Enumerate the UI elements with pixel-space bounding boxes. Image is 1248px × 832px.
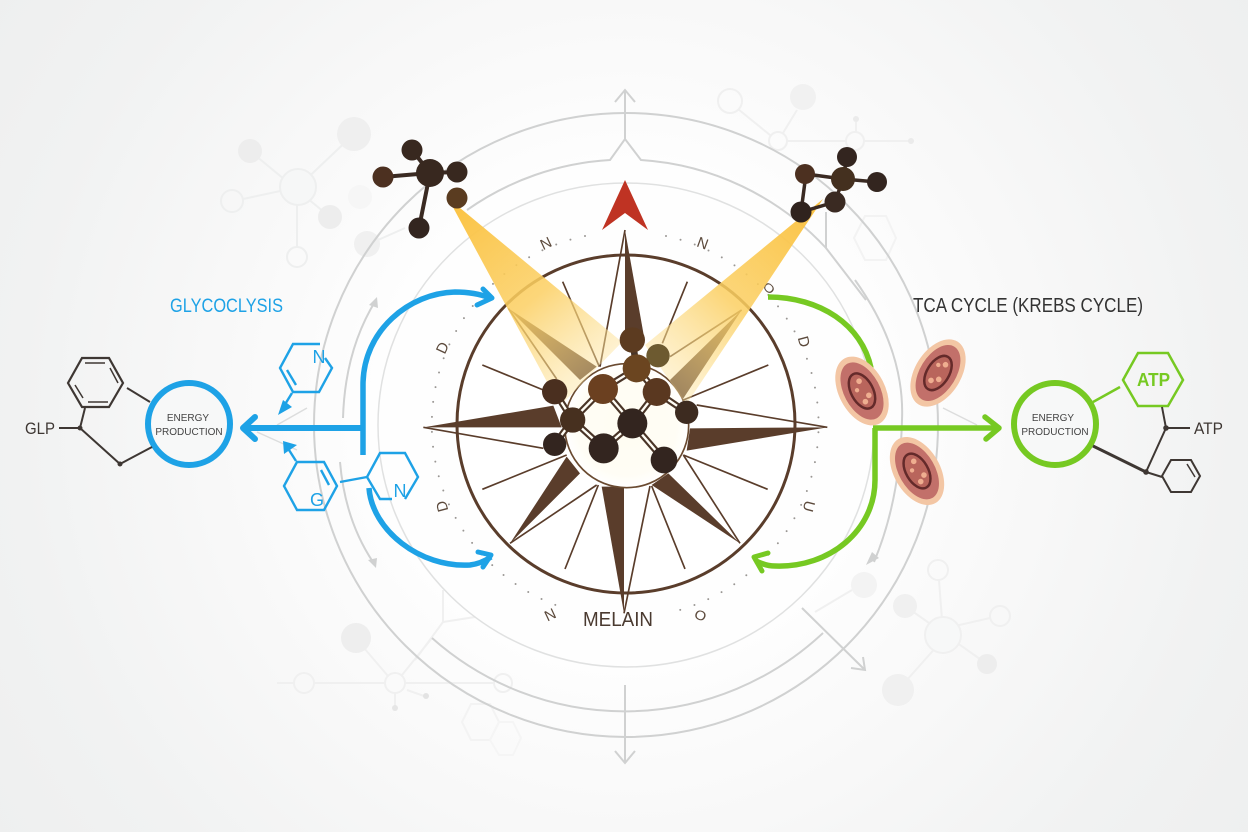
mitochondrion bottom right — [879, 427, 955, 515]
molecule bonds — [555, 340, 687, 460]
compass direction letters: N — [695, 234, 711, 254]
yellow light beam: right — [645, 199, 823, 405]
blue hexagon N upper — [278, 344, 332, 415]
gray orbit rings — [314, 113, 938, 737]
blue hexagon N lower — [340, 453, 418, 501]
right green arrow — [873, 425, 996, 431]
compass direction letters — [433, 234, 818, 624]
label: GLP: GLP — [25, 419, 55, 438]
upper blue arrowhead — [477, 289, 492, 305]
compass direction letters: D — [433, 499, 452, 514]
molecule atoms — [542, 327, 698, 473]
molecule bond highlights — [555, 368, 687, 460]
left blue arrow — [246, 425, 363, 431]
dark molecule: top left — [372, 140, 468, 238]
heading: glycolysis: GLYCOCLYSIS — [170, 295, 283, 317]
right green arrowhead — [985, 417, 999, 439]
compass direction letters: O — [760, 279, 778, 297]
compass direction letters: U — [799, 499, 818, 514]
ATP hexagon — [1093, 353, 1183, 406]
red north arrow — [602, 180, 648, 230]
green energy production circle — [1014, 383, 1096, 465]
gray arrowheads on orbit — [368, 297, 879, 568]
compass rose — [423, 230, 827, 613]
blue energy production circle: ENERGY — [167, 413, 209, 424]
compass direction letters: D — [433, 339, 453, 357]
blue hexagon N lower: N — [394, 481, 406, 501]
gray arrow: north — [615, 90, 635, 139]
blue hexagon N upper: N — [312, 347, 326, 367]
upper blue arrow — [363, 292, 490, 455]
green energy production circle: PRODUCTION — [1021, 427, 1089, 438]
gray arrow: south east — [802, 608, 865, 670]
heading: TCA cycle: TCA CYCLE (KREBS CYCLE) — [913, 295, 1143, 317]
lower blue arrowhead — [478, 552, 491, 567]
blue pathway arrows — [243, 289, 492, 567]
lower green arrow — [756, 428, 875, 566]
compass direction letters: N — [541, 604, 558, 624]
label: ATP: ATP — [1194, 419, 1223, 438]
sixteen-wind thin lines — [423, 230, 827, 613]
blue energy production circle: PRODUCTION — [155, 427, 223, 438]
faint connector lines — [257, 408, 977, 450]
compass star points — [423, 230, 827, 613]
compass direction letters: N — [538, 234, 555, 254]
left blue arrowhead — [243, 417, 255, 439]
lower green arrowhead — [754, 553, 768, 571]
ATP hexagon: ATP — [1137, 370, 1170, 390]
lower blue arrow — [369, 488, 491, 565]
GLP structure — [25, 358, 152, 466]
label: melain: MELAIN — [583, 609, 653, 631]
green energy production circle: ENERGY — [1032, 413, 1074, 424]
compass direction letters: D — [794, 334, 813, 349]
yellow light beam: left — [448, 198, 622, 406]
blue energy production circle — [148, 383, 230, 465]
blue hexagon G — [283, 441, 337, 510]
gray arrow: south — [615, 685, 635, 763]
compass direction letters: O — [693, 605, 709, 624]
dark molecule: top right — [790, 147, 887, 222]
melanin molecule — [542, 327, 698, 473]
mitochondrion left — [824, 348, 900, 434]
faint molecule: bottom left — [277, 590, 521, 755]
compass center disc — [565, 364, 689, 488]
blue hexagon G: G — [310, 490, 324, 510]
mitochondrion top right — [899, 329, 977, 417]
faint molecule: bottom right — [815, 560, 1010, 706]
faint molecule: top left — [221, 117, 405, 267]
compass outer ring — [457, 255, 795, 593]
compass dotted ring — [432, 236, 819, 613]
faint molecule: top right — [718, 84, 914, 260]
green pathway arrows — [754, 297, 999, 571]
ATP structure — [1093, 407, 1223, 492]
upper green arc — [768, 297, 871, 368]
